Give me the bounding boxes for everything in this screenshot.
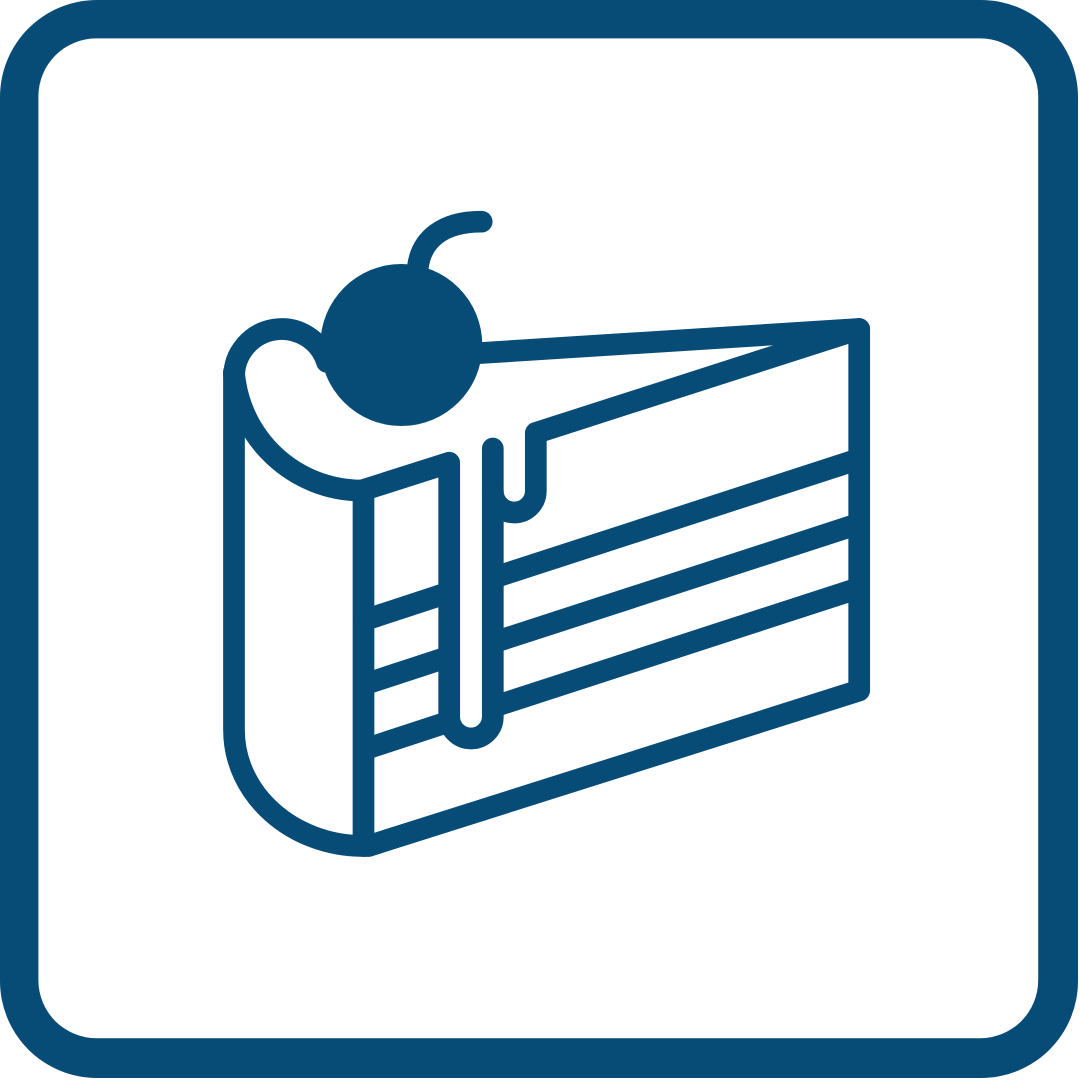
cherry <box>320 264 482 426</box>
front vertical edge <box>353 496 374 846</box>
cake outline <box>234 329 859 846</box>
icing drip edge <box>493 329 859 512</box>
cake slice <box>234 222 859 846</box>
icing top curl <box>234 329 327 377</box>
layer lines right <box>499 460 855 705</box>
layer lines left <box>369 594 444 748</box>
cherry stem <box>418 222 482 268</box>
rounded back edge and top front edge <box>234 372 493 738</box>
